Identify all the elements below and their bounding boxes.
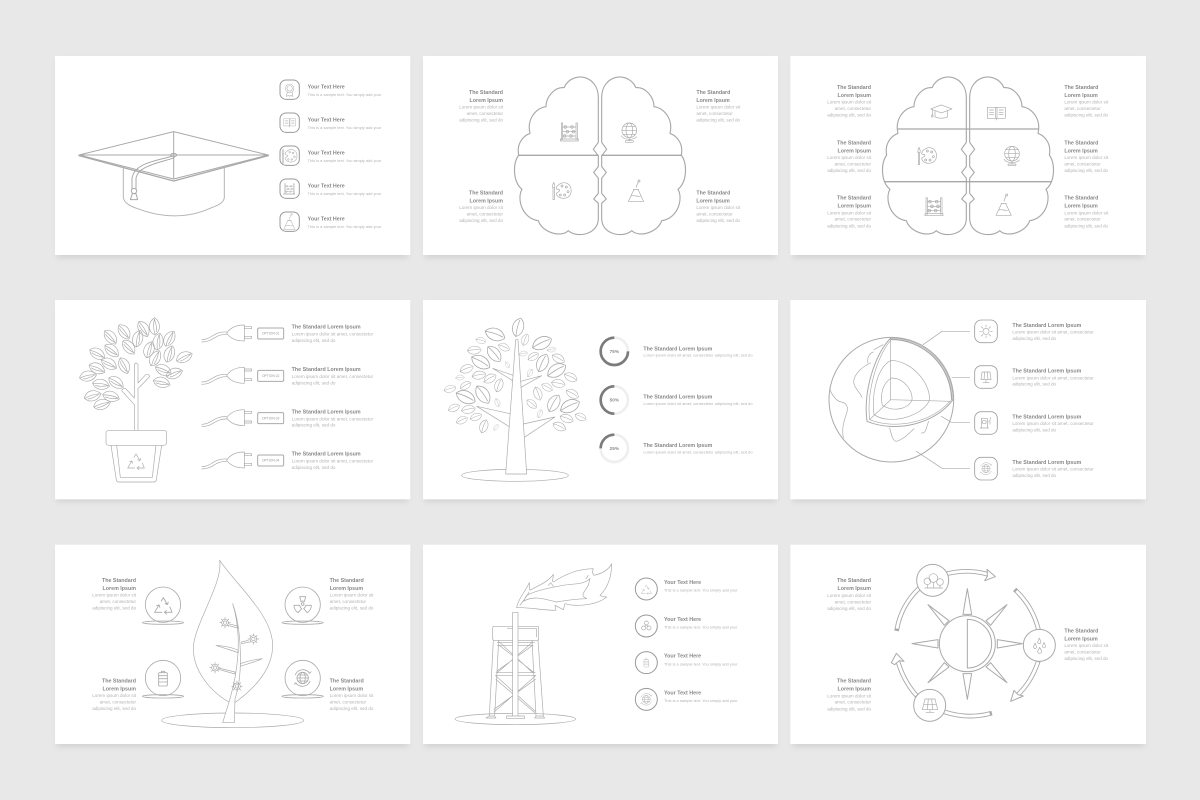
text: upper left: adipiscing elit, sed do: [827, 113, 871, 118]
icon: abacus: [280, 179, 299, 198]
text: lower right: [330, 678, 374, 711]
text: ring 75%: The Standard Lorem Ipsum: [643, 346, 713, 352]
text: bottom left: amet, consectetur: [467, 211, 503, 216]
icon: battery circle: [635, 652, 657, 674]
text: bottom right: amet, consectetur: [696, 211, 733, 216]
text: item 3: Your Text Here: [308, 151, 345, 157]
text: layer 3: The Standard Lorem Ipsum: [1012, 414, 1082, 420]
text: upper left: amet, consectetur: [835, 599, 871, 604]
text: item 4: This is a sample text. You simply add your: [308, 191, 382, 196]
text: layer 1: Lorem ipsum dolor sit amet, consectetur: [1012, 330, 1094, 335]
text: upper right: Lorem Ipsum: [1064, 93, 1098, 99]
icon: globe: [621, 123, 637, 142]
icon: abacus: [925, 198, 943, 216]
text: middle left: Lorem ipsum dolor sit: [827, 155, 872, 160]
text: ring 25%: [643, 443, 753, 454]
text: upper left: Lorem ipsum dolor sit: [92, 593, 137, 598]
text: right: [1064, 628, 1109, 661]
text: option 1: [292, 325, 374, 343]
text: ring 50%: The Standard Lorem Ipsum: [643, 395, 713, 401]
text: upper left: amet, consectetur: [100, 599, 136, 604]
text: option 3: Lorem ipsum dolor sit amet, consectetur: [292, 416, 374, 421]
option label 1: [258, 328, 284, 339]
text: right: The Standard: [1064, 628, 1098, 634]
text: lower left: The Standard: [837, 678, 871, 684]
panel: potted tree and plugs: [55, 300, 410, 499]
text: upper left: [92, 578, 137, 611]
text: middle left: adipiscing elit, sed do: [827, 168, 871, 173]
text: bottom right: The Standard: [696, 190, 730, 196]
text: layer 2: Lorem ipsum dolor sit amet, consectetur: [1012, 375, 1094, 380]
oil rig illustration: [455, 564, 612, 725]
text: upper right: Lorem Ipsum: [330, 586, 363, 592]
panel: big tree and progress rings: [423, 300, 778, 499]
option label 2: [258, 370, 284, 381]
text: layer 1: adipiscing elit, sed do: [1012, 336, 1057, 341]
text: layer 4: adipiscing elit, sed do: [1012, 473, 1057, 478]
text: layer 2: The Standard Lorem Ipsum: [1012, 369, 1082, 375]
earth cross-section: [829, 331, 970, 468]
text: upper left: [827, 85, 872, 118]
text: option 2: The Standard Lorem Ipsum: [292, 367, 361, 373]
text: lower left: amet, consectetur: [835, 700, 871, 705]
panel: oil rig: [423, 545, 778, 744]
text: item 2: [308, 118, 382, 130]
progress ring 75%: [601, 338, 628, 365]
text: top right: The Standard: [696, 90, 730, 96]
text: top right: [696, 90, 741, 123]
text: option 4: adipiscing elit, sed do: [292, 465, 336, 470]
text: bottom right: [696, 190, 741, 223]
text: option 4: Lorem ipsum dolor sit amet, consectetur: [292, 459, 374, 464]
text: upper right: Lorem ipsum dolor sit: [1064, 100, 1109, 105]
panel: leaf: [55, 545, 410, 744]
icon: solar panel circle: [914, 689, 946, 721]
text: lower right: adipiscing elit, sed do: [1064, 223, 1109, 228]
text: ring 75%: [643, 346, 753, 358]
text: lower right: Lorem Ipsum: [1064, 204, 1098, 210]
text: item 1: Your Text Here: [308, 85, 345, 91]
text: lower left: Lorem Ipsum: [838, 204, 871, 210]
panel: brain with six segments: [790, 56, 1146, 255]
text: lower right: Lorem ipsum dolor sit: [1064, 210, 1109, 215]
text: lower right: amet, consectetur: [330, 699, 367, 704]
text: upper right: adipiscing elit, sed do: [330, 606, 374, 611]
text: lower right: adipiscing elit, sed do: [330, 706, 374, 711]
panel: brain with four segments: [423, 56, 778, 255]
text: layer 1: [1012, 323, 1094, 341]
text: upper right: amet, consectetur: [1064, 106, 1101, 111]
text: middle right: adipiscing elit, sed do: [1064, 168, 1109, 173]
icon: sun: [975, 320, 997, 343]
text: option 4: [292, 452, 374, 470]
text: lower right: The Standard: [330, 678, 364, 684]
text: item 1: Your Text Here: [664, 580, 701, 586]
text: lower left: adipiscing elit, sed do: [827, 706, 871, 711]
text: item 2: This is a sample text. You simply add your: [664, 625, 738, 630]
plug 3: [202, 410, 252, 427]
icon: flask: [280, 212, 299, 231]
text: item 4: Your Text Here: [308, 184, 345, 190]
sun diagram: [912, 589, 1022, 699]
text: middle right: The Standard: [1064, 140, 1098, 146]
text: lower left: adipiscing elit, sed do: [92, 706, 136, 711]
panel: graduation cap: [55, 56, 410, 255]
text: top left: [459, 90, 504, 123]
text: upper left: Lorem Ipsum: [838, 586, 871, 592]
icon: trees circle: [917, 564, 949, 596]
text: item 2: Your Text Here: [664, 617, 701, 623]
icon: flask: [628, 180, 644, 201]
text: item 3: [308, 151, 382, 163]
text: option 1: The Standard Lorem Ipsum: [292, 325, 361, 331]
option label 3: OPTION 03: [262, 416, 280, 420]
text: top left: adipiscing elit, sed do: [459, 118, 503, 123]
icon: globe: [1004, 146, 1019, 166]
text: top right: adipiscing elit, sed do: [696, 118, 741, 123]
text: top right: Lorem Ipsum: [696, 98, 730, 104]
text: right: adipiscing elit, sed do: [1064, 656, 1109, 661]
brain outline: [515, 77, 685, 235]
text: middle left: Lorem Ipsum: [838, 148, 871, 154]
text: upper left: amet, consectetur: [835, 106, 871, 111]
text: bottom left: The Standard: [469, 190, 503, 196]
text: top left: Lorem ipsum dolor sit: [459, 105, 504, 110]
text: option 3: adipiscing elit, sed do: [292, 423, 336, 428]
text: option 3: [292, 409, 374, 428]
text: upper left: Lorem ipsum dolor sit: [827, 593, 872, 598]
text: layer 3: adipiscing elit, sed do: [1012, 427, 1057, 432]
cycle arrows: [891, 569, 1039, 716]
option label 1: OPTION 01: [262, 332, 280, 336]
big tree illustration: [443, 317, 588, 481]
text: upper left: Lorem Ipsum: [103, 586, 136, 592]
text: layer 2: adipiscing elit, sed do: [1012, 382, 1057, 387]
text: top left: Lorem Ipsum: [470, 98, 503, 104]
text: lower left: The Standard: [837, 196, 871, 202]
text: lower left: Lorem ipsum dolor sit: [827, 693, 872, 698]
plug 1: [202, 325, 252, 342]
text: option 4: The Standard Lorem Ipsum: [292, 452, 361, 458]
icon: palette: [553, 182, 571, 200]
text: lower left: amet, consectetur: [835, 217, 871, 222]
text: upper right: Lorem ipsum dolor sit: [330, 593, 374, 598]
text: item 2: Your Text Here: [308, 118, 345, 124]
text: item 5: This is a sample text. You simply add your: [308, 224, 382, 229]
text: item 4: [664, 690, 738, 703]
text: lower right: amet, consectetur: [1064, 217, 1101, 222]
text: item 2: [664, 617, 738, 630]
text: lower left: Lorem ipsum dolor sit: [827, 210, 872, 215]
text: middle right: Lorem ipsum dolor sit: [1064, 155, 1109, 160]
text: item 3: This is a sample text. You simply add your: [308, 158, 382, 163]
text: lower left: Lorem Ipsum: [103, 686, 136, 692]
text: ring 25%: The Standard Lorem Ipsum: [643, 443, 713, 449]
text: lower left: The Standard: [102, 678, 136, 684]
text: upper left: [827, 578, 872, 611]
text: middle left: [827, 140, 872, 173]
leaf illustration: [162, 560, 304, 728]
text: bottom left: [459, 190, 504, 223]
text: bottom right: Lorem Ipsum: [696, 198, 730, 204]
text: upper left: The Standard: [837, 578, 871, 584]
text: option 2: Lorem ipsum dolor sit amet, consectetur: [292, 374, 374, 379]
text: top left: The Standard: [469, 90, 503, 96]
text: option 2: adipiscing elit, sed do: [292, 380, 336, 385]
text: upper right: The Standard: [1064, 85, 1098, 91]
brain outline: [883, 77, 1053, 235]
text: right: Lorem ipsum dolor sit: [1064, 643, 1109, 648]
icon: fuel station: [975, 412, 997, 434]
icon: recycling globe: [975, 457, 997, 480]
text: item 5: [308, 217, 382, 229]
option label 4: OPTION 04: [262, 459, 280, 463]
plug 4: [202, 452, 252, 469]
progress ring 50%: 50%: [610, 398, 620, 403]
panel: earth layers: [790, 300, 1146, 499]
panel shadows: [57, 60, 1144, 747]
text: option 1: adipiscing elit, sed do: [292, 338, 336, 343]
text: option 3: The Standard Lorem Ipsum: [292, 409, 361, 415]
progress ring 75%: 75%: [610, 349, 620, 354]
text: upper left: adipiscing elit, sed do: [92, 606, 136, 611]
text: bottom left: Lorem Ipsum: [470, 198, 503, 204]
text: lower left: [92, 678, 137, 711]
text: lower left: Lorem Ipsum: [838, 686, 871, 692]
icon: book: [280, 113, 299, 132]
text: ring 25%: Lorem ipsum dolor sit amet, consectetur adipiscing elit, sed do: [643, 449, 753, 454]
icon: battery badge: [142, 660, 184, 698]
option label 2: OPTION 02: [262, 374, 280, 378]
text: item 4: Your Text Here: [664, 690, 701, 696]
icon: recycle circle: [635, 578, 657, 600]
text: upper right: adipiscing elit, sed do: [1064, 113, 1109, 118]
text: lower left: Lorem ipsum dolor sit: [92, 693, 137, 698]
icon: globe circle: [635, 688, 657, 710]
text: item 1: This is a sample text. You simply add your: [664, 588, 738, 593]
text: item 2: This is a sample text. You simply add your: [308, 125, 382, 130]
text: item 1: This is a sample text. You simply add your: [308, 92, 382, 97]
text: middle right: amet, consectetur: [1064, 161, 1101, 166]
text: item 3: Your Text Here: [664, 654, 701, 660]
text: lower left: amet, consectetur: [100, 699, 136, 704]
text: lower left: adipiscing elit, sed do: [827, 223, 871, 228]
panel: renewable cycle: [790, 545, 1146, 744]
text: ring 50%: Lorem ipsum dolor sit amet, consectetur adipiscing elit, sed do: [643, 401, 753, 406]
text: item 1: [664, 580, 738, 593]
text: option 2: [292, 367, 374, 385]
text: upper left: The Standard: [102, 578, 136, 584]
text: lower right: Lorem Ipsum: [330, 686, 363, 692]
text: upper right: The Standard: [330, 578, 364, 584]
text: option 1: Lorem ipsum dolor sit amet, consectetur: [292, 332, 374, 337]
text: item 3: [664, 654, 738, 666]
icon: palette: [918, 147, 937, 165]
text: layer 4: [1012, 460, 1094, 478]
text: upper left: The Standard: [837, 85, 871, 91]
plug 2: [202, 367, 252, 384]
text: item 3: This is a sample text. You simply add your: [664, 661, 738, 666]
text: right: amet, consectetur: [1064, 649, 1101, 654]
progress ring 25%: [601, 435, 628, 462]
icon: book: [987, 107, 1005, 120]
option label 3: [258, 413, 284, 424]
icon: solar pump: [975, 366, 997, 388]
text: upper left: Lorem Ipsum: [838, 93, 871, 99]
text: middle left: amet, consectetur: [835, 161, 871, 166]
icon: radiation badge: [282, 587, 323, 624]
text: lower left: [827, 196, 872, 228]
text: bottom left: Lorem ipsum dolor sit: [459, 205, 504, 210]
text: ring 75%: Lorem ipsum dolor sit amet, consectetur adipiscing elit, sed do: [643, 353, 753, 358]
icon: graduation cap: [931, 105, 952, 118]
text: middle right: Lorem Ipsum: [1064, 148, 1098, 154]
text: right: Lorem Ipsum: [1064, 636, 1098, 642]
text: middle left: The Standard: [837, 140, 871, 146]
graduation cap illustration: [79, 132, 268, 216]
text: layer 1: The Standard Lorem Ipsum: [1012, 323, 1082, 329]
text: lower right: Lorem ipsum dolor sit: [330, 693, 374, 698]
text: top right: amet, consectetur: [696, 111, 733, 116]
icon: recycle badge: [142, 587, 184, 624]
text: lower right: The Standard: [1064, 196, 1098, 202]
icon: palette: [280, 146, 299, 165]
text: layer 3: Lorem ipsum dolor sit amet, consectetur: [1012, 421, 1094, 426]
progress ring 50%: [601, 386, 628, 414]
text: bottom right: Lorem ipsum dolor sit: [696, 205, 741, 210]
text: top right: Lorem ipsum dolor sit: [696, 105, 741, 110]
progress ring 25%: 25%: [610, 446, 620, 451]
text: lower left: [827, 678, 872, 711]
text: item 4: This is a sample text. You simply add your: [664, 698, 738, 703]
text: layer 4: The Standard Lorem Ipsum: [1012, 460, 1082, 466]
icon: abacus: [560, 123, 578, 141]
icon: medal: [280, 80, 299, 99]
text: upper right: [330, 578, 374, 611]
text: upper right: [1064, 85, 1109, 118]
text: layer 3: [1012, 414, 1094, 432]
icon: flask: [996, 194, 1011, 215]
text: layer 4: Lorem ipsum dolor sit amet, consectetur: [1012, 467, 1094, 472]
icon: water drops circle: [1023, 629, 1055, 661]
text: bottom left: adipiscing elit, sed do: [459, 218, 503, 223]
text: top left: amet, consectetur: [467, 111, 503, 116]
text: upper right: amet, consectetur: [330, 599, 367, 604]
text: upper left: Lorem ipsum dolor sit: [827, 100, 872, 105]
text: middle right: [1064, 140, 1109, 173]
text: layer 2: [1012, 369, 1094, 387]
icon: world badge: [282, 660, 323, 698]
text: item 1: [308, 85, 382, 97]
text: item 5: Your Text Here: [308, 217, 345, 223]
text: lower right: [1064, 196, 1109, 228]
text: upper left: adipiscing elit, sed do: [827, 606, 871, 611]
icon: triple circle: [635, 615, 657, 637]
text: item 4: [308, 184, 382, 196]
text: ring 50%: [643, 395, 753, 406]
text: bottom right: adipiscing elit, sed do: [696, 218, 741, 223]
option label 4: [258, 455, 284, 466]
potted tree illustration: [79, 318, 194, 482]
